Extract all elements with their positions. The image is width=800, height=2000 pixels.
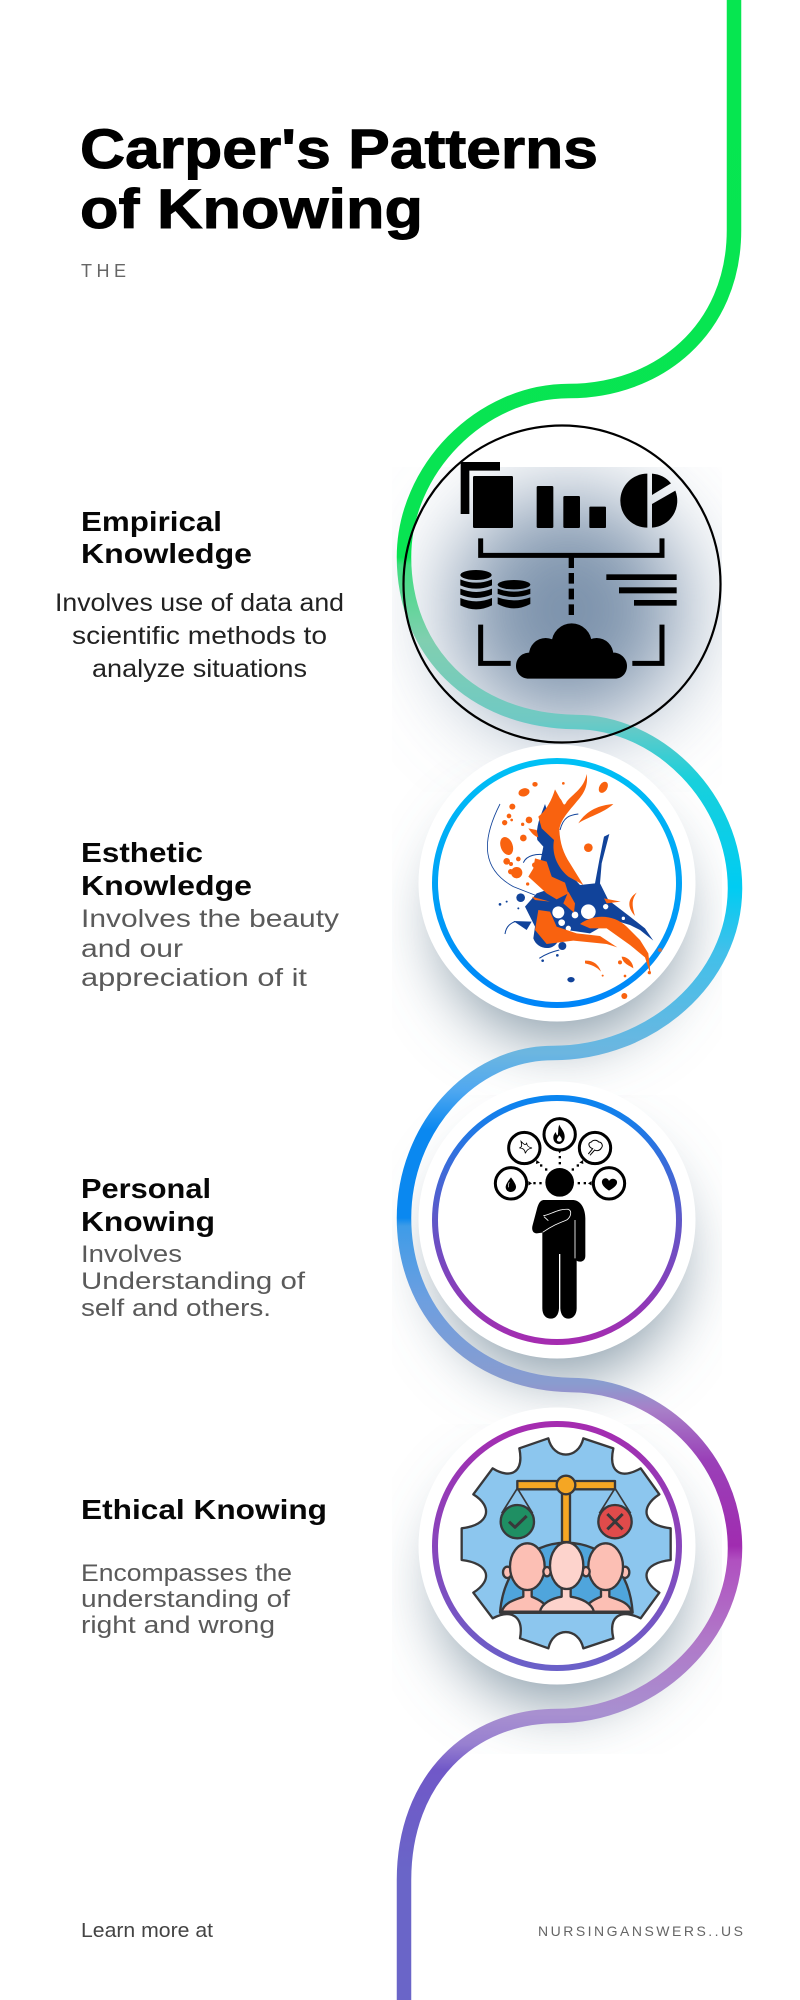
heading: empirical: Empirical	[81, 506, 222, 537]
description: empirical: scientific methods to	[72, 622, 327, 650]
heading: personal	[81, 1173, 215, 1237]
description: ethical: Encompasses the	[81, 1560, 292, 1587]
heading: ethical: Ethical Knowing	[81, 1494, 327, 1525]
heading: esthetic: Esthetic	[81, 837, 203, 868]
description: esthetic	[81, 905, 340, 992]
title: Carper's Patterns	[80, 117, 598, 180]
description: ethical: understanding of	[81, 1586, 290, 1613]
title: of Knowing	[80, 177, 423, 240]
subtitle: THE	[81, 261, 126, 281]
heading: esthetic	[81, 837, 252, 901]
panel: esthetic knowledge text	[81, 837, 340, 992]
icon: data analytics	[460, 462, 677, 679]
description: personal: Understanding of	[81, 1268, 305, 1295]
panel: empirical knowledge text	[55, 506, 344, 683]
panel: ethical knowing text	[81, 1494, 327, 1639]
description: personal: self and others.	[81, 1295, 271, 1322]
icon: paint splatter	[487, 774, 662, 999]
soft shadows behind circles	[440, 494, 684, 1704]
description: empirical: analyze situations	[92, 655, 307, 683]
icon: person with emotion bubbles	[495, 1119, 625, 1319]
description: ethical	[81, 1560, 292, 1639]
description: personal: Involves	[81, 1241, 182, 1268]
panel: personal knowing text	[81, 1173, 305, 1322]
circle: ethical gear and scales	[418, 1408, 696, 1684]
heading: personal: Personal	[81, 1173, 211, 1204]
winding gradient path	[404, 0, 735, 2000]
title	[80, 117, 598, 240]
description: esthetic: appreciation of it	[81, 964, 307, 992]
heading: personal: Knowing	[81, 1206, 215, 1237]
description: empirical	[55, 589, 344, 683]
circle: esthetic paint splash	[418, 744, 696, 1022]
description: esthetic: Involves the beauty	[81, 905, 340, 933]
heading: empirical: Knowledge	[81, 538, 252, 569]
description: empirical: Involves use of data and	[55, 589, 344, 617]
footer: website: NURSINGANSWERS..US	[538, 1923, 743, 1939]
heading: esthetic: Knowledge	[81, 870, 252, 901]
circle: empirical data icon	[404, 426, 720, 742]
footer: learn more: Learn more at	[81, 1920, 213, 1942]
description: personal	[81, 1241, 305, 1322]
circle: personal figure	[418, 1082, 696, 1358]
heading: empirical	[81, 506, 252, 569]
description: ethical: right and wrong	[81, 1612, 275, 1639]
description: esthetic: and our	[81, 935, 183, 963]
icon: gear, scales and people	[462, 1438, 671, 1648]
